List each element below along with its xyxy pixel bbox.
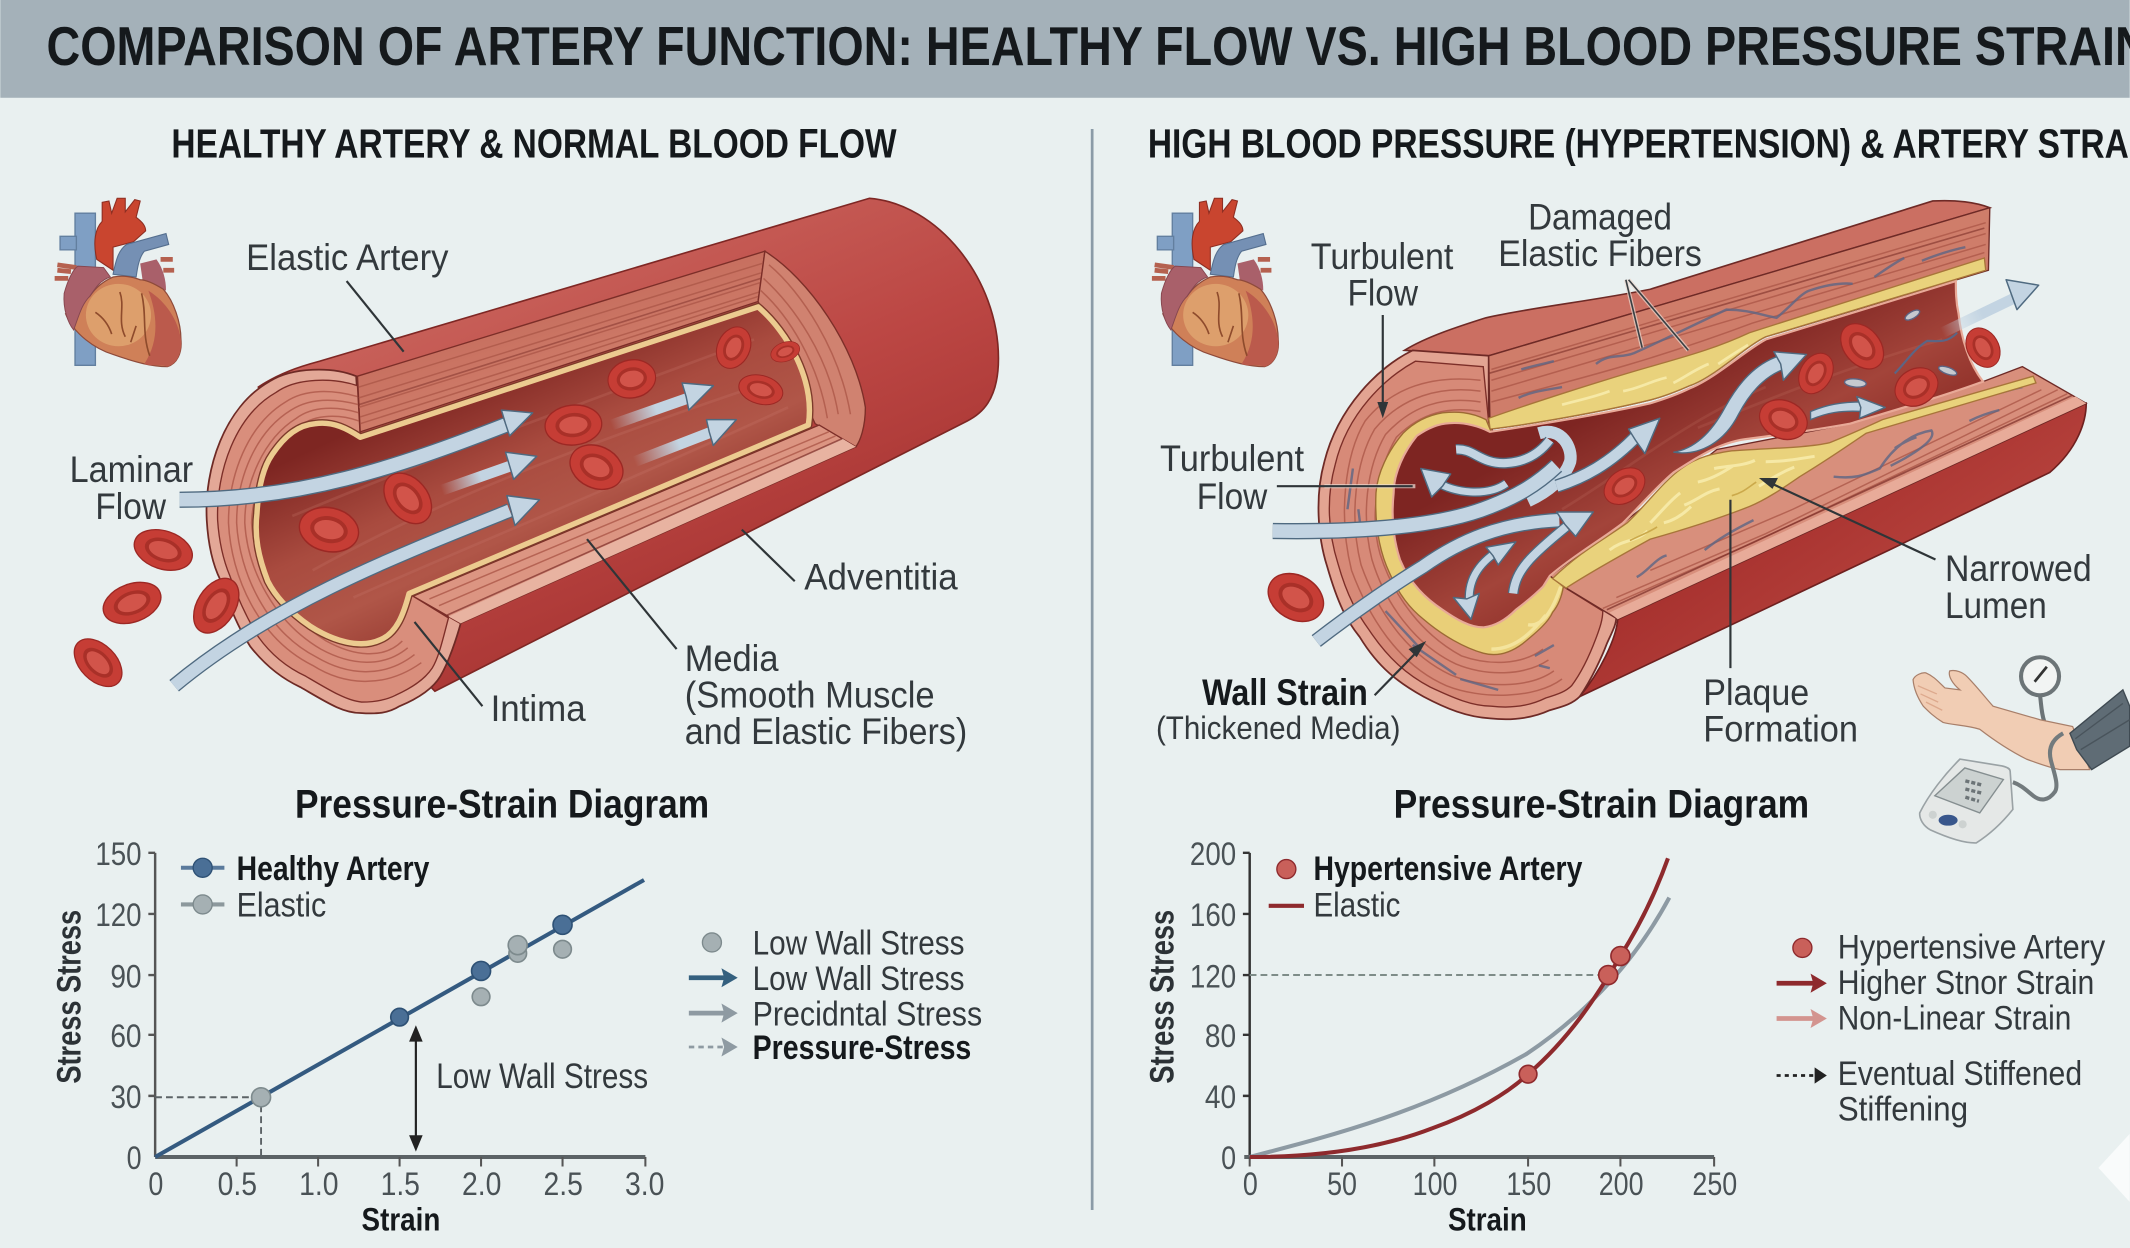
annotation: low wall stress bbox=[409, 1025, 648, 1152]
flow arrows: turbulent bbox=[1273, 280, 2039, 641]
label: turbulent flow (left): Flow bbox=[1197, 476, 1268, 517]
points: healthy bbox=[391, 915, 572, 1026]
label: intima bbox=[415, 622, 586, 729]
plaque: upper bbox=[1489, 258, 1986, 429]
label: wall strain: Wall Strain bbox=[1202, 672, 1368, 713]
x axis ticks bbox=[148, 1165, 664, 1202]
label: damaged elastic fibers bbox=[1498, 197, 1702, 350]
legend: chart inset: Elastic bbox=[1314, 887, 1400, 925]
legend: healthy artery: Pressure-Stress bbox=[753, 1029, 971, 1067]
x axis ticks: 50 bbox=[1327, 1165, 1357, 1202]
y axis ticks: 30 bbox=[110, 1078, 142, 1115]
y axis ticks: 120 bbox=[1190, 957, 1236, 994]
legend: healthy artery: Low Wall Stress bbox=[753, 925, 965, 963]
artery lower wall bbox=[1550, 367, 2086, 619]
label: elastic artery: Elastic Artery bbox=[246, 237, 449, 278]
y axis ticks: 90 bbox=[110, 957, 142, 994]
x axis ticks: 2.5 bbox=[544, 1165, 583, 1202]
points: elastic bbox=[252, 936, 571, 1107]
label: plaque formation: Formation bbox=[1703, 708, 1858, 749]
label: turbulent flow (top) bbox=[1311, 236, 1453, 418]
y axis ticks: 160 bbox=[1190, 896, 1236, 933]
legend: hypertensive artery bbox=[1777, 929, 2105, 1128]
panel: hypertensive artery bbox=[1152, 197, 2130, 843]
artery body: outer wall bbox=[258, 198, 998, 691]
artery upper cut wall bbox=[357, 251, 765, 432]
artery lumen bbox=[1393, 281, 1983, 649]
x axis ticks: 1.0 bbox=[299, 1165, 338, 1202]
x axis ticks: 2.0 bbox=[462, 1165, 501, 1202]
x axis ticks: 1.5 bbox=[381, 1165, 420, 1202]
artery front cut face bbox=[1318, 350, 1616, 719]
legend: hypertensive artery: Non-Linear Strain bbox=[1838, 999, 2071, 1037]
icon: heart bbox=[1152, 198, 1278, 367]
legend: healthy artery: Low Wall Stress bbox=[753, 960, 965, 998]
heading: left diagram: Pressure-Strain Diagram bbox=[295, 783, 709, 827]
axis title: stress: Stress Stress bbox=[1144, 910, 1182, 1084]
label: laminar flow bbox=[70, 449, 193, 527]
panel: healthy artery bbox=[55, 198, 998, 752]
label: turbulent flow (left) bbox=[1160, 438, 1415, 517]
x axis ticks: 100 bbox=[1413, 1165, 1457, 1202]
icon: heart bbox=[55, 198, 181, 367]
artery front cut face bbox=[207, 370, 461, 713]
legend: chart inset: Elastic bbox=[237, 887, 326, 925]
curve: elastic reference bbox=[1250, 898, 1669, 1157]
label: plaque formation: Plaque bbox=[1703, 672, 1809, 713]
label: plaque formation bbox=[1703, 500, 1858, 749]
label: laminar flow: Laminar bbox=[70, 449, 193, 490]
y axis ticks: 60 bbox=[110, 1017, 142, 1054]
label: damaged elastic fibers: Damaged bbox=[1528, 197, 1672, 238]
x axis ticks: 0.5 bbox=[218, 1165, 257, 1202]
x axis ticks: 150 bbox=[1506, 1165, 1551, 1202]
label: narrowed lumen: Narrowed bbox=[1945, 548, 2092, 589]
x axis ticks: 0 bbox=[1243, 1165, 1258, 1202]
artery lumen bbox=[256, 307, 809, 644]
legend: hypertensive artery: Hypertensive Artery bbox=[1838, 929, 2105, 967]
x axis ticks: 200 bbox=[1599, 1165, 1644, 1202]
legend: healthy artery bbox=[689, 925, 982, 1067]
plaque: lower bbox=[1553, 376, 2036, 588]
legend: hypertensive artery: Higher Stnor Strain bbox=[1838, 964, 2094, 1002]
legend: chart inset bbox=[1269, 850, 1583, 925]
artery upper wall bbox=[1489, 208, 1990, 429]
annotation: low wall stress: Low Wall Stress bbox=[436, 1057, 648, 1096]
artery underside wall bbox=[1580, 403, 2086, 697]
label: adventitia: Adventitia bbox=[804, 556, 958, 597]
red blood cells bbox=[65, 321, 803, 696]
y axis ticks bbox=[95, 835, 142, 1176]
legend: hypertensive artery: Eventual Stiffened bbox=[1838, 1055, 2082, 1093]
label: wall strain bbox=[1156, 641, 1426, 746]
label: turbulent flow (top): Turbulent bbox=[1311, 236, 1453, 277]
legend: chart inset: Hypertensive Artery bbox=[1314, 850, 1583, 888]
curve: hypertensive bbox=[1250, 858, 1668, 1157]
legend: healthy artery: Precidntal Stress bbox=[753, 995, 982, 1033]
label: media bbox=[587, 539, 967, 752]
y axis ticks: 0 bbox=[127, 1139, 142, 1176]
axis title: stress: Stress Stress bbox=[50, 910, 88, 1084]
legend: hypertensive artery: Stiffening bbox=[1838, 1090, 1968, 1128]
label: media: (Smooth Muscle bbox=[685, 675, 935, 716]
legend: chart inset: Healthy Artery bbox=[237, 850, 430, 888]
legend: chart inset bbox=[181, 850, 430, 925]
line series: healthy artery bbox=[155, 880, 644, 1157]
y axis ticks: 150 bbox=[95, 835, 142, 872]
flow arrows: laminar bbox=[174, 383, 736, 686]
label: turbulent flow (top): Flow bbox=[1347, 273, 1419, 314]
label: narrowed lumen: Lumen bbox=[1945, 585, 2047, 626]
y axis ticks: 200 bbox=[1190, 835, 1236, 872]
label: media: and Elastic Fibers) bbox=[685, 711, 967, 752]
artery top outer strip bbox=[1404, 201, 1990, 356]
axis title: strain: Strain bbox=[362, 1200, 440, 1237]
label: elastic artery bbox=[246, 237, 449, 352]
label: narrowed lumen bbox=[1759, 478, 2092, 626]
artery yellow intimal ring bbox=[1376, 412, 1563, 655]
axis title: strain: Strain bbox=[1448, 1200, 1527, 1237]
points: hypertensive bbox=[1519, 947, 1630, 1083]
artery back cut face bbox=[758, 251, 865, 447]
heading: right diagram: Pressure-Strain Diagram bbox=[1394, 783, 1809, 827]
x axis ticks bbox=[1243, 1165, 1737, 1202]
x axis ticks: 0 bbox=[148, 1165, 163, 1202]
title banner bbox=[0, 0, 2130, 98]
chart: healthy artery stress vs strain bbox=[50, 835, 664, 1237]
label: laminar flow: Flow bbox=[95, 486, 166, 527]
label: media: Media bbox=[685, 638, 779, 679]
label: turbulent flow (left): Turbulent bbox=[1160, 438, 1304, 479]
artery lower cut wall bbox=[413, 425, 856, 623]
label: adventitia bbox=[742, 530, 958, 597]
label: wall strain: (Thickened Media) bbox=[1156, 709, 1400, 746]
x axis ticks: 3.0 bbox=[625, 1165, 664, 1202]
chart: hypertensive artery stress vs strain bbox=[1144, 835, 1737, 1237]
red blood cells bbox=[1260, 315, 2007, 631]
label: intima: Intima bbox=[491, 688, 586, 729]
y axis ticks: 40 bbox=[1205, 1078, 1236, 1115]
y axis ticks: 0 bbox=[1221, 1139, 1236, 1176]
x axis ticks: 250 bbox=[1692, 1165, 1737, 1202]
icon: blood pressure monitor and arm bbox=[1913, 657, 2130, 843]
y axis ticks: 120 bbox=[95, 896, 142, 933]
label: damaged elastic fibers: Elastic Fibers bbox=[1498, 233, 1702, 274]
y axis ticks: 80 bbox=[1205, 1017, 1236, 1054]
heading: healthy artery: HEALTHY ARTERY & NORMAL BLOOD FLOW bbox=[171, 121, 897, 167]
y axis ticks bbox=[1190, 835, 1236, 1176]
